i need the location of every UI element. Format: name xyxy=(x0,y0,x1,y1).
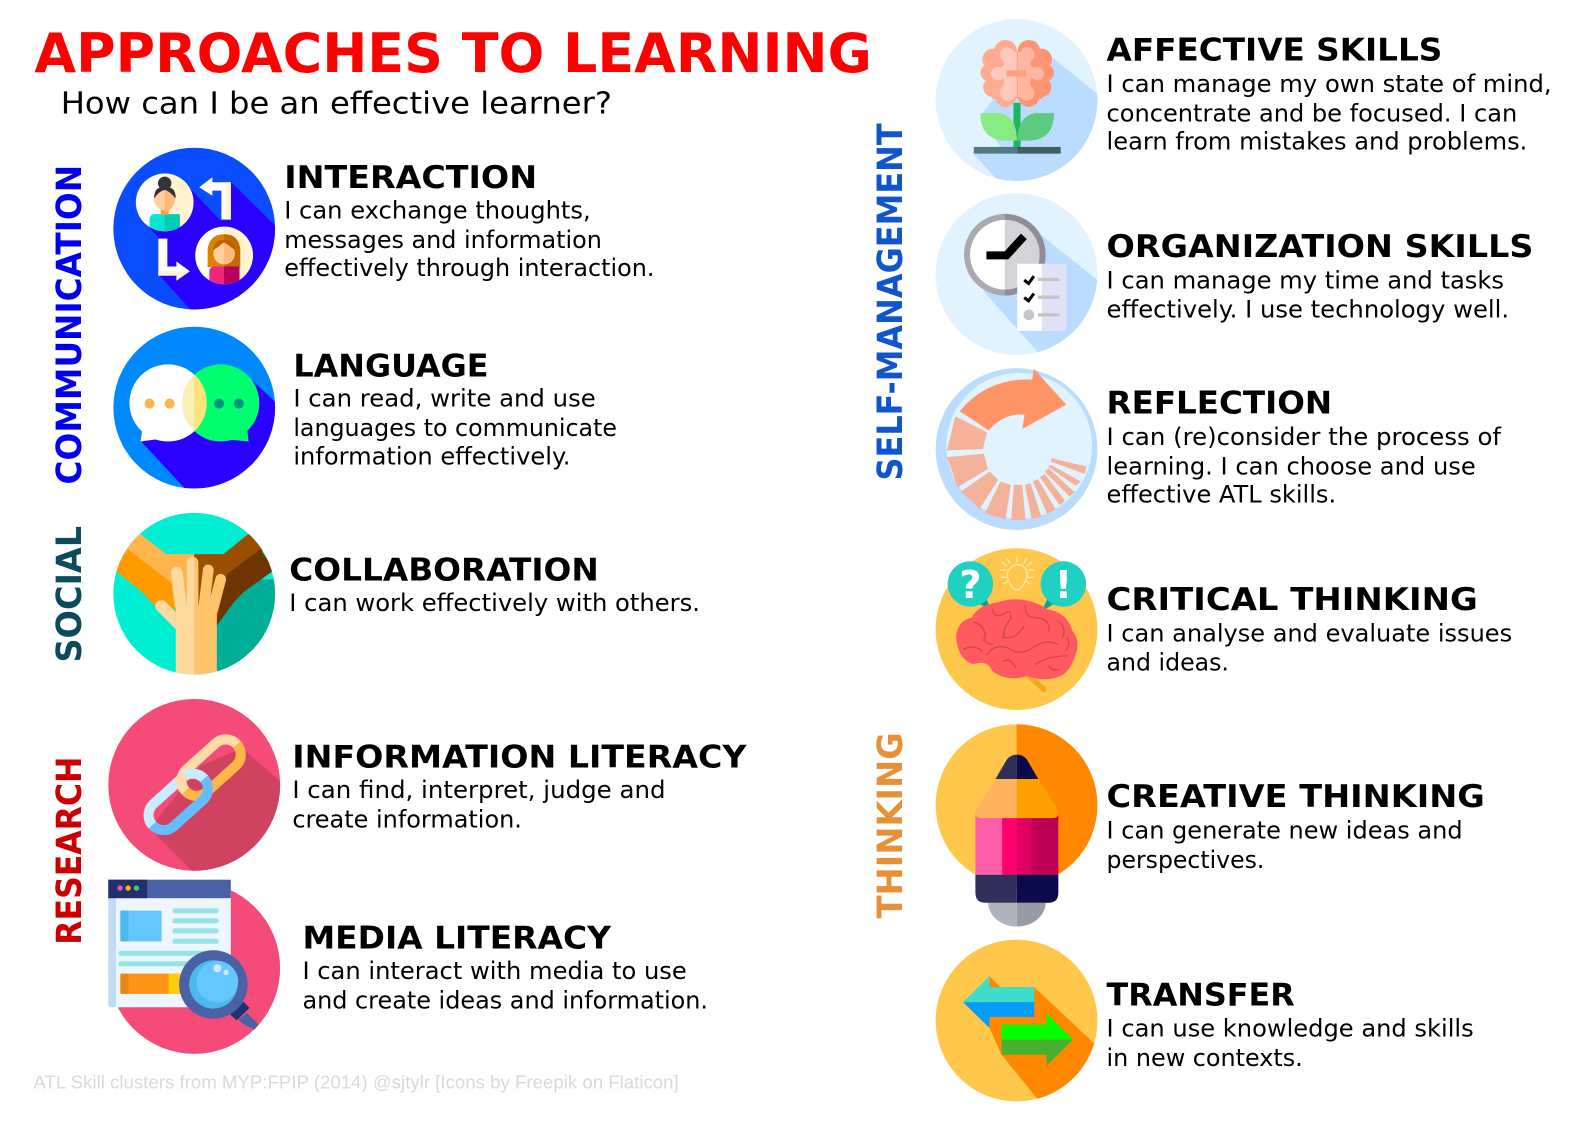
text block: reflection: effective ATL skills. xyxy=(1107,480,1336,509)
text block: affective skills: learn from mistakes and problems. xyxy=(1107,127,1527,156)
text block: reflection: learning. I can choose and use xyxy=(1107,451,1476,480)
icon: collaboration xyxy=(113,513,278,680)
text block: critical thinking: I can analyse and evaluate issues xyxy=(1107,618,1512,647)
icon: critical thinking: ? xyxy=(959,563,982,608)
text block: information literacy xyxy=(292,740,747,833)
text block: reflection xyxy=(1107,386,1501,509)
text block: organization skills xyxy=(1107,229,1533,324)
text block: transfer xyxy=(1107,977,1474,1072)
text block: transfer: I can use knowledge and skills xyxy=(1107,1014,1474,1043)
text block: language: information effectively. xyxy=(293,441,570,470)
text block: creative thinking: CREATIVE THINKING xyxy=(1107,779,1485,815)
text block: information literacy: INFORMATION LITERACY xyxy=(292,740,747,776)
title: APPROACHES TO LEARNING xyxy=(34,21,872,85)
text block: critical thinking xyxy=(1107,582,1512,677)
cluster label: research: RESEARCH xyxy=(50,757,90,945)
text block: collaboration xyxy=(289,553,700,617)
text block: affective skills xyxy=(1107,33,1552,156)
footer credit: ATL Skill clusters from MYP:FPIP (2014) @sjtylr [Icons by Freepik on Flaticon] xyxy=(33,1071,679,1092)
icon: media literacy xyxy=(108,880,280,1054)
text block: creative thinking: I can generate new ideas and xyxy=(1107,815,1463,844)
icon: language xyxy=(113,327,277,490)
text block: information literacy: I can find, interpret, judge and xyxy=(292,775,666,804)
text block: language: LANGUAGE xyxy=(293,348,489,384)
text block: organization skills: I can manage my time and tasks xyxy=(1107,265,1504,294)
text block: media literacy: I can interact with media to use xyxy=(302,956,687,985)
cluster label: self-management: SELF-MANAGEMENT xyxy=(871,123,911,480)
text block: reflection: I can (re)consider the process of xyxy=(1107,422,1501,451)
text block: affective skills: concentrate and be focused. I can xyxy=(1107,98,1517,127)
text block: creative thinking: perspectives. xyxy=(1107,845,1264,874)
text block: interaction: I can exchange thoughts, xyxy=(284,195,591,224)
text block: affective skills: I can manage my own state of mind, xyxy=(1107,69,1552,98)
text block: interaction: effectively through interaction. xyxy=(284,253,654,282)
text block: interaction: messages and information xyxy=(284,225,602,254)
text block: interaction: INTERACTION xyxy=(284,160,537,196)
icon: reflection xyxy=(936,368,1097,530)
text block: media literacy: and create ideas and information. xyxy=(302,985,708,1014)
icon: organization skills xyxy=(936,193,1099,355)
text block: organization skills: effectively. I use technology well. xyxy=(1107,295,1509,324)
cluster label: thinking: THINKING xyxy=(871,732,911,918)
text block: creative thinking xyxy=(1107,779,1485,874)
text block: affective skills: AFFECTIVE SKILLS xyxy=(1107,33,1442,69)
text block: media literacy: MEDIA LITERACY xyxy=(302,921,611,957)
text block: language: I can read, write and use xyxy=(293,384,596,413)
text block: language xyxy=(293,348,617,470)
subtitle: How can I be an effective learner? xyxy=(61,86,612,121)
text block: language: languages to communicate xyxy=(293,413,617,442)
text block: critical thinking: and ideas. xyxy=(1107,648,1229,677)
text block: critical thinking: CRITICAL THINKING xyxy=(1107,582,1478,618)
text block: organization skills: ORGANIZATION SKILLS xyxy=(1107,229,1533,265)
text block: transfer: in new contexts. xyxy=(1107,1043,1303,1072)
icon: creative thinking xyxy=(936,724,1097,927)
text block: information literacy: create information. xyxy=(292,804,522,833)
icon: interaction xyxy=(113,148,277,311)
text block: collaboration: COLLABORATION xyxy=(289,553,599,589)
text block: interaction xyxy=(284,160,654,282)
icon: affective skills xyxy=(936,19,1099,182)
cluster label: social: SOCIAL xyxy=(50,526,90,663)
text block: transfer: TRANSFER xyxy=(1107,977,1295,1013)
text block: media literacy xyxy=(302,921,708,1014)
icon: critical thinking xyxy=(936,548,1097,710)
text block: reflection: REFLECTION xyxy=(1107,386,1332,422)
icon: information literacy xyxy=(108,699,282,872)
icon: critical thinking: ! xyxy=(1055,563,1072,608)
cluster label: communication: COMMUNICATION xyxy=(50,165,90,484)
text block: collaboration: I can work effectively with others. xyxy=(289,588,700,617)
icon: transfer xyxy=(936,940,1099,1105)
